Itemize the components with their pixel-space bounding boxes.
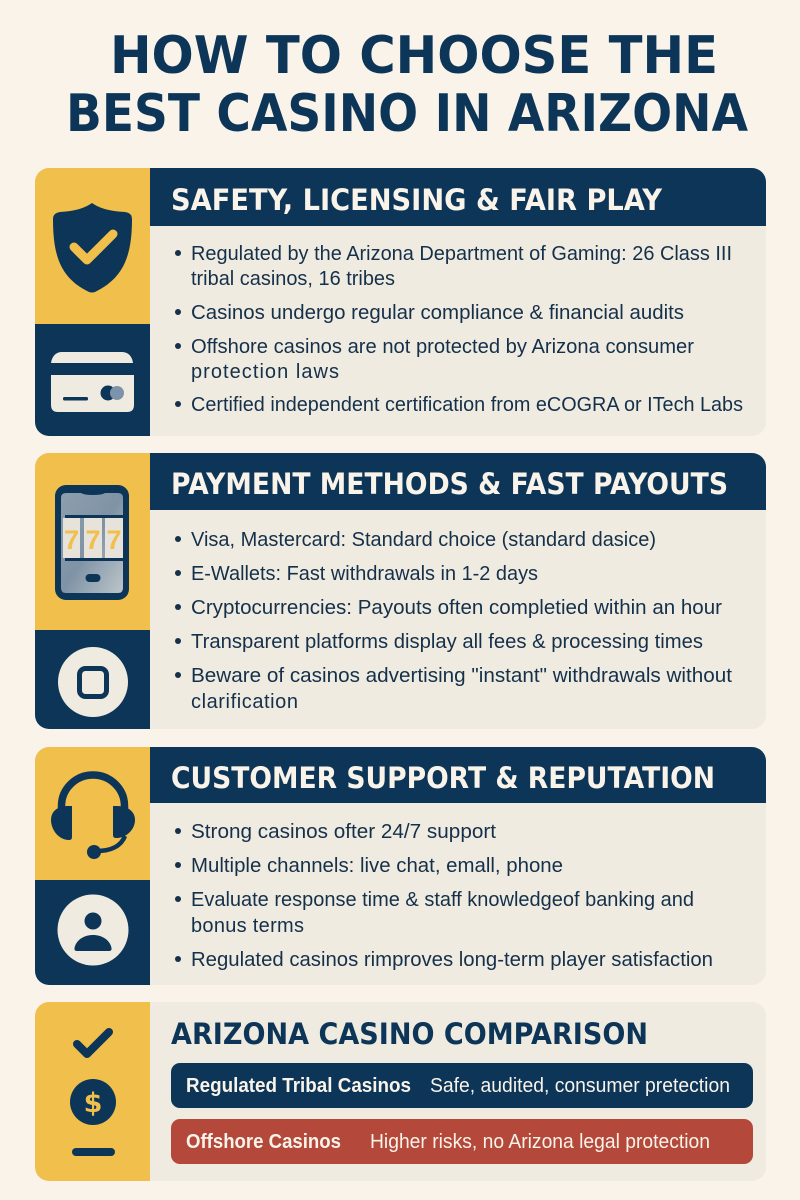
icon: headset — [51, 775, 135, 859]
icon: phone with 777 slot reels: 7 — [85, 525, 101, 555]
bullet list: Transparent platforms display all fees & processing times — [191, 631, 703, 653]
bullet list: Casinos undergo regular compliance & financial audits — [191, 302, 684, 324]
icon: phone with 777 slot reels: 7 — [64, 525, 79, 555]
comparison row: regulated tribal casinos — [171, 1063, 753, 1108]
bullet list: Regulated casinos rimproves long-term player satisfaction — [191, 949, 713, 971]
title — [66, 26, 748, 144]
title: BEST CASINO IN ARIZONA — [66, 84, 748, 144]
bullet list: tribal casinos, 16 tribes — [191, 268, 395, 290]
bullet list — [175, 821, 713, 971]
section heading — [150, 168, 766, 226]
bullet list: protection laws — [191, 361, 339, 383]
comparison row: regulated tribal casinos: Regulated Tribal Casinos — [186, 1075, 411, 1097]
bullet list: Offshore casinos are not protected by Arizona consumer — [191, 336, 694, 358]
panel: customer support and reputation — [35, 747, 766, 985]
panel: payment methods and fast payouts — [35, 453, 766, 729]
bullet list: Evaluate response time & staff knowledgeof banking and — [191, 889, 694, 911]
section heading — [150, 747, 766, 803]
bullet list: Regulated by the Arizona Department of Gaming: 26 Class III — [191, 243, 732, 265]
icon: phone with 777 slot reels: 7 — [106, 525, 122, 555]
icon: credit card — [51, 352, 134, 412]
section heading: SAFETY, LICENSING & FAIR PLAY — [171, 183, 663, 217]
title: HOW TO CHOOSE THE — [110, 26, 718, 86]
bullet list: Cryptocurrencies: Payouts often completied within an hour — [191, 597, 722, 619]
bullet list: Multiple channels: live chat, emall, phone — [191, 855, 563, 877]
section heading: ARIZONA CASINO COMPARISON — [171, 1017, 648, 1051]
comparison row: offshore casinos: Offshore Casinos — [186, 1131, 341, 1153]
icon: dollar coin: $ — [84, 1088, 102, 1119]
bullet list: clarification — [191, 691, 298, 713]
icon: check mark — [77, 1032, 109, 1054]
comparison row: regulated tribal casinos: Safe, audited, consumer pretection — [430, 1075, 730, 1097]
bullet list: Certified independent certification from eCOGRA or ITech Labs — [191, 394, 743, 416]
panel: arizona casino comparison — [35, 1002, 766, 1181]
panel: safety, licensing and fair play — [35, 168, 766, 436]
bullet list: bonus terms — [191, 915, 304, 937]
icon: phone with 777 slot reels — [55, 485, 129, 600]
bullet list — [175, 243, 743, 416]
icon: circle with square — [58, 647, 128, 717]
icon: minus bar — [72, 1148, 115, 1156]
bullet list: Strong casinos ofter 24/7 support — [191, 821, 496, 843]
bullet list: E-Wallets: Fast withdrawals in 1-2 days — [191, 563, 538, 585]
bullet list — [175, 529, 732, 713]
section heading: PAYMENT METHODS & FAST PAYOUTS — [171, 467, 728, 501]
icon: person — [58, 894, 128, 966]
comparison row: offshore casinos: Higher risks, no Arizona legal protection — [370, 1131, 710, 1153]
bullet list: Visa, Mastercard: Standard choice (standard dasice) — [191, 529, 656, 551]
section heading: CUSTOMER SUPPORT & REPUTATION — [171, 761, 715, 795]
bullet list: Beware of casinos advertising "instant" withdrawals without — [191, 665, 732, 687]
section heading — [150, 453, 766, 510]
comparison row: offshore casinos — [171, 1119, 753, 1164]
icon: dollar coin — [70, 1079, 116, 1125]
icon: shield with check — [53, 203, 132, 292]
